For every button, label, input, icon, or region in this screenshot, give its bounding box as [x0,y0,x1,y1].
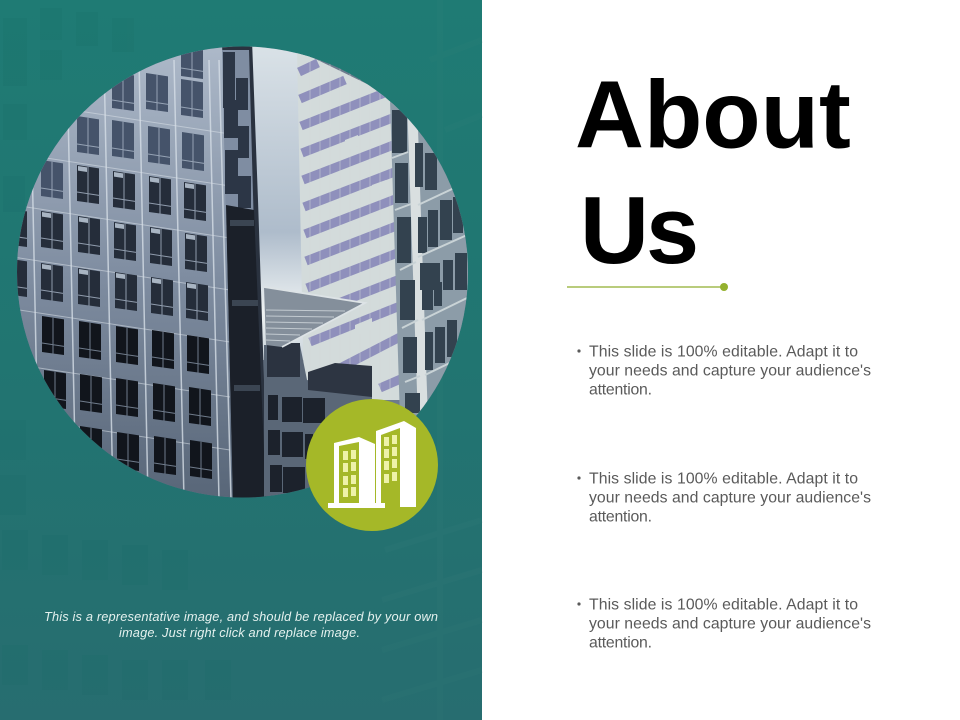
text block: bullet 1: your needs and capture your audience's [589,362,871,380]
icon: left building [334,437,375,504]
panel: teal image background [0,0,482,720]
text block: bullet 3: your needs and capture your audience's [589,616,871,632]
text block: bullet 3: attention. [589,634,652,652]
divider line with dot [567,283,728,291]
text block: bullet 1: This slide is 100% editable. Adapt it to [589,344,858,360]
text block: bullet 2: attention. [589,508,652,526]
text block: bullet 2: your needs and capture your audience's [589,490,871,506]
sky [250,40,310,360]
glass tower [390,102,468,416]
title: About [575,62,851,168]
title [575,62,851,284]
caption: image placeholder note [44,609,438,640]
text block: bullet 3: This slide is 100% editable. Adapt it to [589,596,858,614]
icon: right building [376,421,416,507]
facade windows [5,40,212,479]
canopy [264,287,365,347]
caption: image placeholder note: image. Just right click and replace image. [119,625,360,640]
text block: bullet 1: attention. [589,382,652,398]
dark tower [222,40,268,500]
text block: bullet 3 [577,596,871,652]
image: city buildings in circle [17,46,468,498]
caption: image placeholder note: This is a representative image, and should be replaced by your own [44,609,438,624]
text block: bullet 1 [577,344,871,398]
main facade [17,46,233,498]
text block: bullet 2 [577,470,871,526]
icon: green circle with office buildings [306,399,438,531]
title: Us [580,178,696,284]
low building [264,343,372,500]
text block: bullet 2: This slide is 100% editable. Adapt it to [589,470,858,488]
facade pilasters and bands [30,60,231,500]
white office tower [297,50,404,400]
